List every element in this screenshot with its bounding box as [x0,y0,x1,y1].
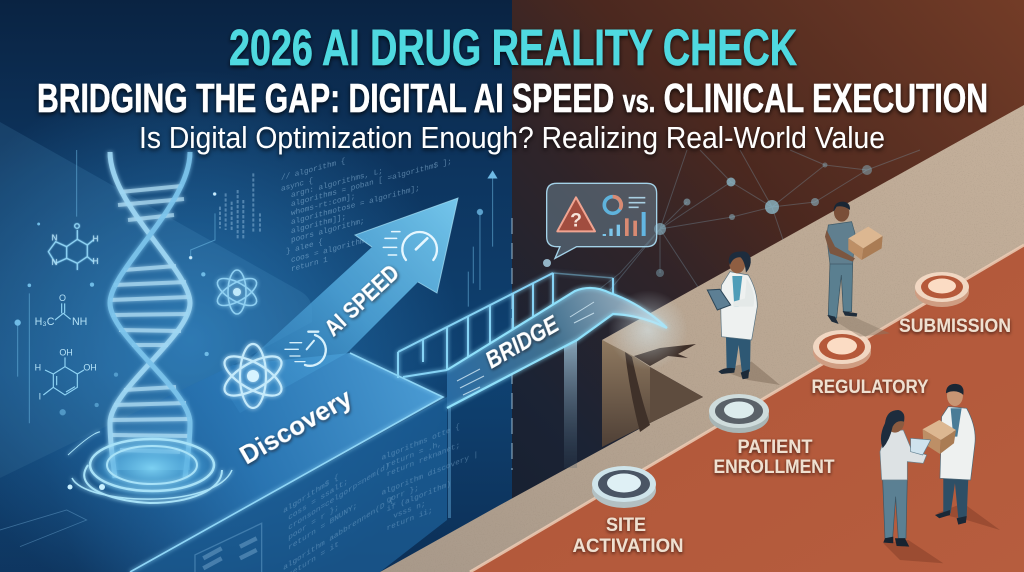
code block: lower: return = BNUNY; [288,501,357,553]
code block: top: algorithms = poban [ =algorithm$ ]; [291,158,452,209]
molecule icons [35,224,99,401]
molecule: purine [48,224,99,270]
label: submission: SUBMISSION [899,316,1011,337]
label: patient enrollment [714,437,835,478]
molecule: purine: H [93,257,99,266]
icon: warning triangle: ? [570,211,582,232]
molecule: acetamide: H₃C [35,316,55,328]
title [37,19,988,155]
node: site activation [592,466,656,508]
code block: top [281,129,452,277]
label: site activation: SITE [606,515,646,536]
panel: front face with code [130,397,447,572]
molecule: purine: N [52,234,58,243]
icon: donut chart [604,197,621,213]
code block: lower: algorithm aabbrennen(D { [283,495,394,572]
bridge deck [447,288,667,408]
molecule: acetamide [35,293,87,328]
person: doctor holding box [923,384,1000,530]
icon: large atom [219,344,287,408]
panel: terracotta ground [470,245,1024,572]
platform edge highlights [130,353,443,572]
node: patient enrollment [709,394,769,433]
icon: stopwatch on arrow [285,332,326,366]
label: patient enrollment: ENROLLMENT [714,457,835,478]
title line 1: 2026 AI DRUG REALITY CHECK [229,19,797,76]
arrow: AI speed [222,198,458,413]
code block: lower: algorithm$ { [283,472,338,516]
subtitle: Is Digital Optimization Enough? Realizing Real-World Value [139,120,885,155]
code block: lower: cronson=celgorp=nem(d) [288,461,389,533]
chip outline and data bars [0,510,262,572]
translucent upper panel [0,122,312,478]
code block: lower: if (algorithm) [387,480,451,514]
label: Discovery: Discovery [234,382,357,470]
network constellation [560,150,920,320]
code block: top: } alee { [286,239,323,257]
code block: lower: return ii; [387,506,433,533]
icon: gauge on arrowhead [383,232,437,260]
molecule: purine: N [52,258,58,267]
molecule: acetamide: O [59,293,66,303]
panel: beige clinical path [380,100,1024,572]
molecule: acetamide: NH [72,316,87,328]
molecule: catechol: OH [83,363,97,373]
bridge supports [448,338,577,518]
panel: digital AI side background [0,0,512,572]
arrow label: AI SPEED [319,259,404,341]
label: site activation [572,515,684,557]
timeline path [470,245,1024,572]
bridge label: BRIDGE [481,310,564,374]
code block: top: return 1 [291,256,328,274]
code block: lower: vsss n; [393,499,425,521]
DNA glowing base [68,432,232,503]
code block: lower [283,415,478,572]
speech bubble: warning and charts [547,183,657,258]
molecule: catechol: H [35,363,41,373]
code block: lower: return reknanet; [387,441,460,479]
code block: top: // algorithm { [281,158,346,183]
molecule: catechol: OH [59,347,73,357]
DNA light beam [112,395,190,470]
code block: lower: return = .h, [387,439,442,470]
code block: top: poors algorithm; [291,218,365,245]
label: patient enrollment: PATIENT [738,437,813,458]
code block: lower: coss = ssalt; [288,476,348,523]
code block: lower: gorr }; [387,484,419,505]
icon: mini bar chart [603,198,646,236]
code block: top: async { [281,177,313,194]
panel: clinical execution side background [512,0,1024,572]
code block: lower: poor = r }; [288,502,339,543]
code block: top: algorithm]]; [291,214,346,236]
molecule: catechol [35,347,97,401]
code block: top: algorithmotose = algorithm]; [291,185,420,227]
code block: top: coos = algorithm; [291,236,369,265]
DNA helix [110,152,190,478]
code block: top: whoms-rt:com]; [291,193,355,218]
code block: lower: algorithms otte { [382,423,460,463]
code block: top: argn: algorithms, L; [291,168,383,200]
label: site activation: ACTIVATION [572,536,684,557]
bridge end glow [608,290,688,370]
person: worker carrying box [825,202,890,337]
floating dots and pins [15,150,497,423]
DNA rungs [110,186,190,452]
bridge railing [398,273,613,378]
gap cliff [602,340,703,447]
DNA strands [110,152,190,478]
person: woman with clipboard [880,410,943,563]
bubble anchor dot [543,259,551,267]
node: regulatory [813,330,871,369]
molecule: purine: H [93,234,99,243]
code block: lower: algorithm discovery | [382,450,478,498]
label: regulatory: REGULATORY [812,377,929,398]
dashed center line [511,218,513,470]
node: submission [915,272,969,307]
atom icon: upper [213,270,261,314]
molecule: catechol: I [39,391,41,401]
panel: discovery platform [0,353,443,572]
person: doctor with tablet [707,251,780,385]
